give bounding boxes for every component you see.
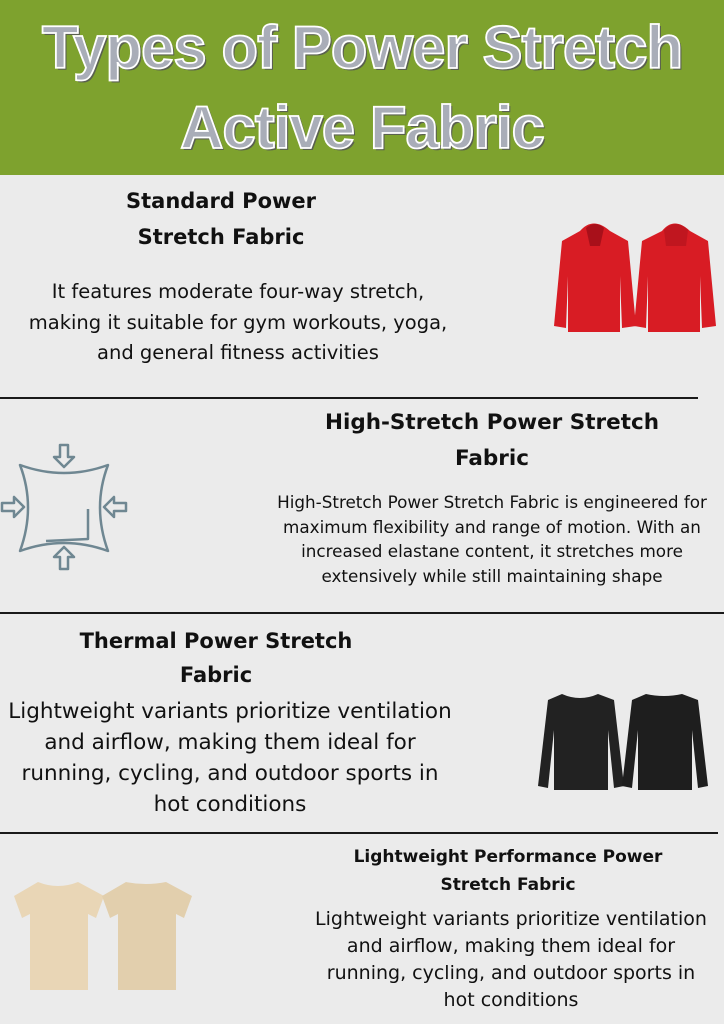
- icon: compression arrows: [0, 444, 128, 570]
- heading: [325, 410, 659, 471]
- heading: Lightweight Performance Power: [354, 847, 662, 867]
- body text: [8, 699, 452, 817]
- title: Types of Power Stretch: [42, 14, 682, 81]
- body text: Lightweight variants prioritize ventilation: [315, 908, 707, 930]
- image: black long sleeve shirts: [538, 694, 708, 790]
- body text: hot conditions: [444, 989, 578, 1011]
- body text: Lightweight variants prioritize ventilation: [8, 699, 452, 724]
- section: lightweight: [14, 847, 707, 1011]
- body text: increased elastane content, it stretches more: [301, 541, 683, 561]
- heading: Fabric: [180, 663, 252, 687]
- body text: maximum flexibility and range of motion. With an: [283, 516, 701, 536]
- heading: Thermal Power Stretch: [80, 629, 352, 653]
- body text: running, cycling, and outdoor sports in: [22, 761, 438, 786]
- body text: High-Stretch Power Stretch Fabric is engineered for: [277, 492, 707, 512]
- body text: [315, 908, 707, 1011]
- body text: and airflow, making them ideal for: [347, 935, 675, 957]
- body text: [277, 492, 707, 586]
- heading: High-Stretch Power Stretch: [325, 410, 659, 435]
- image: beige t-shirts: [14, 882, 192, 990]
- title: Active Fabric: [180, 94, 544, 161]
- body text: It features moderate four-way stretch,: [52, 280, 424, 303]
- header banner: [0, 0, 724, 175]
- title: [42, 14, 682, 161]
- body text: [29, 280, 447, 364]
- section: standard: [29, 189, 716, 364]
- heading: [80, 629, 352, 687]
- heading: [126, 189, 316, 249]
- body text: making it suitable for gym workouts, yoga,: [29, 310, 447, 334]
- section: thermal: [8, 629, 708, 817]
- body text: and airflow, making them ideal for: [44, 730, 416, 755]
- heading: Stretch Fabric: [138, 225, 304, 249]
- heading: Standard Power: [126, 189, 316, 213]
- body text: and general fitness activities: [97, 341, 379, 364]
- heading: [354, 847, 662, 895]
- section: high-stretch: [0, 410, 707, 586]
- heading: Fabric: [455, 446, 529, 471]
- body text: hot conditions: [154, 792, 306, 817]
- body text: running, cycling, and outdoor sports in: [327, 962, 695, 984]
- body text: extensively while still maintaining shape: [321, 566, 663, 586]
- image: red hoodies: [554, 224, 716, 332]
- heading: Stretch Fabric: [440, 875, 576, 895]
